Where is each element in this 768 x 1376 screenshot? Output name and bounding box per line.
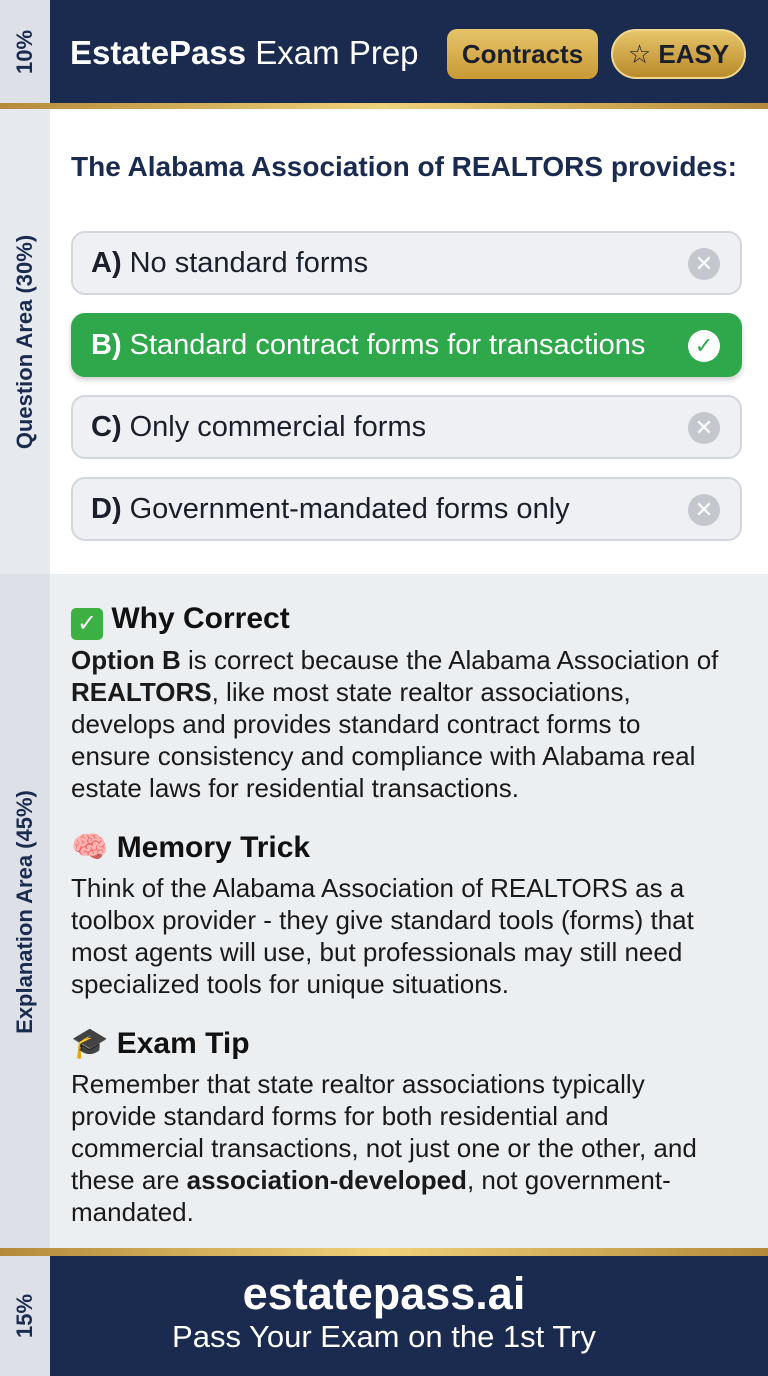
option C: ✕: [695, 415, 713, 440]
side label: Question Area: Question Area (30%): [12, 234, 37, 449]
text: memory trick: toolbox provider - they give standard tools (forms) that: [71, 905, 694, 935]
heading: Exam Tip: 🎓 Exam Tip: [71, 1027, 250, 1060]
side label: 15%: 15%: [12, 1294, 37, 1338]
text: memory trick: specialized tools for unique situations.: [71, 969, 509, 999]
option D: [71, 477, 742, 541]
option B correct: ✓: [695, 333, 713, 358]
text: memory trick: [71, 873, 694, 999]
side label: 10%: [0, 0, 50, 104]
footer brand: estatepass.ai: [243, 1268, 525, 1319]
badge: EASY: ☆ EASY: [628, 39, 729, 69]
heading: Why Correct: ✓: [77, 610, 97, 637]
header title: EstatePass Exam Prep: [70, 34, 419, 71]
text: exam tip: commercial transactions, not just one or the other, and: [71, 1133, 697, 1163]
side label: Explanation Area: Explanation Area (45%): [12, 790, 37, 1033]
option C: [71, 395, 742, 459]
question area: [0, 109, 768, 574]
heading: Why Correct: Why Correct: [111, 602, 290, 635]
text: why correct: ensure consistency and compliance with Alabama real: [71, 741, 695, 771]
text: memory trick: most agents will use, but professionals may still need: [71, 937, 682, 967]
badge: Contracts: [447, 29, 598, 79]
text: why correct: Option B is correct because the Alabama Association of: [71, 645, 718, 675]
text: memory trick: Think of the Alabama Association of REALTORS as a: [71, 873, 684, 903]
option A: A) No standard forms: [91, 247, 368, 279]
badge: Contracts: Contracts: [462, 39, 583, 69]
footer: [0, 1256, 768, 1376]
text: exam tip: [71, 1069, 697, 1227]
gold divider bottom: [0, 1248, 768, 1256]
text: exam tip: these are association-developed, not government-: [71, 1165, 671, 1195]
option A: ✕: [695, 251, 713, 276]
option C: C) Only commercial forms: [91, 411, 426, 443]
option B correct: B) Standard contract forms for transactions: [91, 329, 645, 361]
gold divider top: [0, 103, 768, 109]
side label: 15%: [0, 1256, 50, 1376]
side label: Question Area: [0, 109, 50, 574]
header bar: [0, 0, 768, 104]
badge: EASY: [611, 29, 746, 79]
option D: D) Government-mandated forms only: [91, 493, 570, 525]
side label: 10%: 10%: [12, 30, 37, 74]
option D: ✕: [695, 497, 713, 522]
text: why correct: [71, 645, 718, 803]
heading: Memory Trick: 🧠 Memory Trick: [71, 831, 310, 864]
text: why correct: REALTORS, like most state realtor associations,: [71, 677, 631, 707]
text: exam tip: provide standard forms for both residential and: [71, 1101, 609, 1131]
text: exam tip: Remember that state realtor associations typically: [71, 1069, 645, 1099]
side label: Explanation Area: [0, 574, 50, 1249]
option B correct: [71, 313, 742, 377]
text: why correct: estate laws for residential transactions.: [71, 773, 519, 803]
option A: [71, 231, 742, 295]
explanation area: [0, 574, 768, 1249]
footer tagline: Pass Your Exam on the 1st Try: [172, 1319, 596, 1354]
question text: The Alabama Association of REALTORS provides:: [71, 151, 737, 182]
text: exam tip: mandated.: [71, 1197, 194, 1227]
text: why correct: develops and provides standard contract forms to: [71, 709, 640, 739]
